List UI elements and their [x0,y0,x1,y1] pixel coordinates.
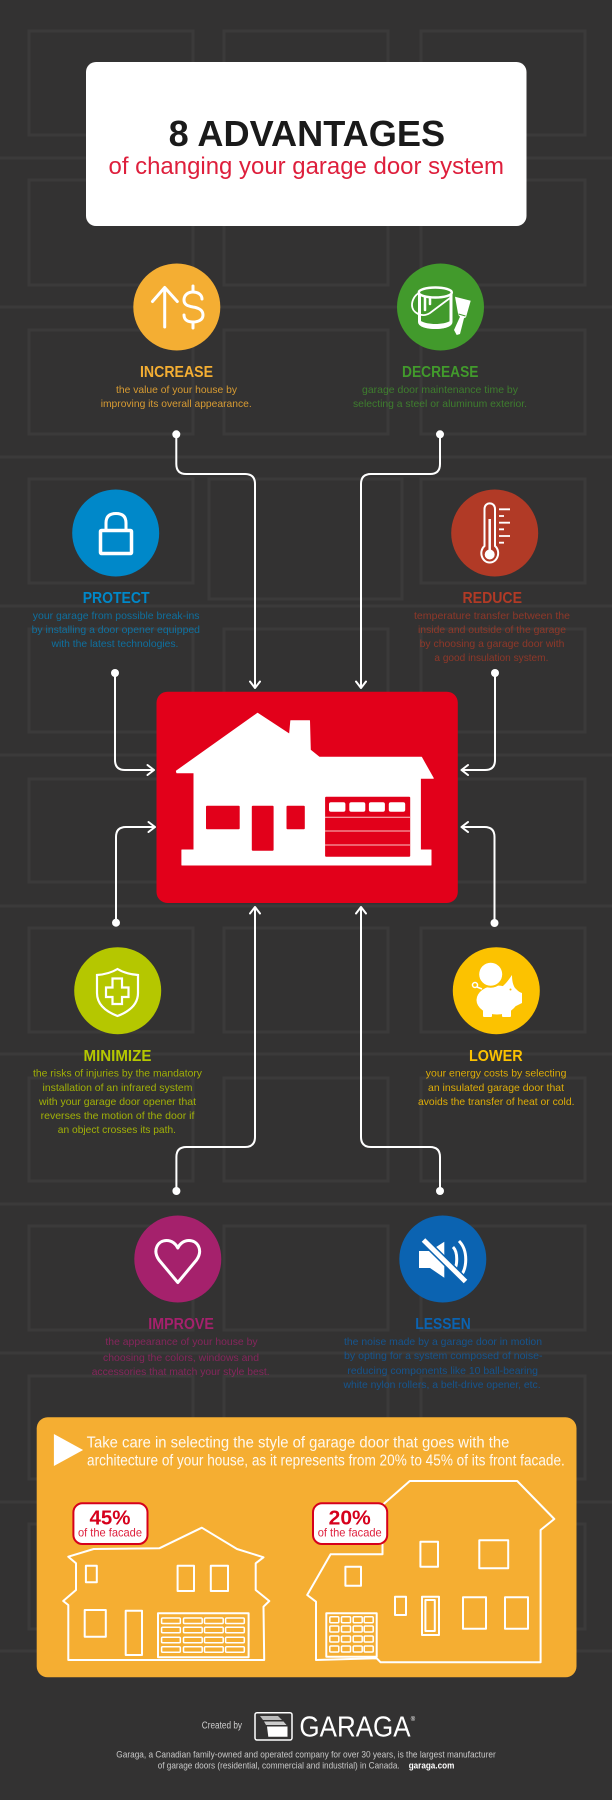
icon: paint can and brush [397,264,484,350]
text: improve: choosing the colors, windows and [103,1352,259,1364]
callout: 20 percent: of the facade [318,1526,382,1540]
icon: house silhouette [176,713,433,865]
advantage: increase [101,264,252,410]
logo: garaga: GARAGA [299,1712,411,1744]
icon: thermometer [451,490,538,576]
icon: heart [134,1216,221,1302]
icon: padlock [72,490,159,576]
text: increase [101,384,252,410]
advantage: improve [92,1216,270,1378]
icon: play triangle [54,1434,83,1466]
text: lessen: reducing components like 10 ball-bearing [347,1365,538,1377]
advantage: protect [32,490,200,650]
heading: minimize: MINIMIZE [84,1048,151,1065]
logo: garaga [255,1712,416,1744]
text: lower: an insulated garage door that [428,1082,564,1094]
text: decrease: garage door maintenance time by [362,384,519,396]
footer [116,1712,496,1771]
icon: piggy bank [453,947,540,1034]
advantage: decrease [353,264,527,410]
text: reduce: inside and outside of the garage [418,624,566,636]
title card [86,62,526,226]
panel text [87,1435,565,1470]
text: decrease [353,384,527,410]
text: minimize: the risks of injuries by the mandatory [33,1068,203,1080]
text: lessen: the noise made by a garage door in motion [344,1336,542,1348]
advantage: reduce [414,490,570,664]
house outline: 20 percent [307,1481,554,1662]
text: minimize: an object crosses its path. [58,1124,176,1136]
callout: 45 percent: 45% [90,1507,131,1529]
heading: reduce: REDUCE [462,590,522,607]
text: decrease: selecting a steel or aluminum exterior. [353,398,527,410]
advantage: lessen [343,1216,543,1391]
callout: 20 percent: 20% [329,1507,371,1529]
heading: improve: IMPROVE [148,1316,214,1333]
text: lessen [343,1336,543,1391]
heading: increase: INCREASE [140,364,213,381]
text: protect: by installing a door opener equipped [32,624,200,636]
text: lessen: white nylon rollers, a belt-drive opener, etc. [343,1379,541,1391]
text: reduce: temperature transfer between the [414,610,570,622]
company description: Garaga, a Canadian family-owned and operated company for over 30 years, is the largest manufacturer [116,1749,496,1760]
text: reduce: a good insulation system. [434,652,548,664]
text: lower: your energy costs by selecting [426,1068,567,1080]
callout: 45 percent [73,1503,148,1544]
arrow: decrease to house [356,430,444,688]
logo: garaga: ® [411,1716,416,1723]
icon: arrow up and dollar [133,264,220,350]
text: minimize: reverses the motion of the door if [41,1110,194,1122]
panel: facade share [37,1417,576,1677]
icon: shield with cross [74,947,161,1034]
house outline: 45 percent [63,1528,269,1660]
heading: lower: LOWER [469,1048,523,1065]
arrow: increase to house [172,430,260,688]
arrow: minimize to house [112,822,155,927]
heading: lessen: LESSEN [415,1316,471,1333]
text: lower [418,1068,574,1108]
text: minimize: with your garage door opener that [38,1096,196,1108]
arrow: reduce to house [462,669,499,775]
text: increase: the value of your house by [116,384,238,396]
arrow: lower to house [462,822,498,927]
heading: protect: PROTECT [83,590,150,607]
text: protect: with the latest technologies. [51,638,178,650]
text: increase: improving its overall appearance. [101,398,252,410]
title subheading: of changing your garage door system [108,153,504,180]
text: lower: avoids the transfer of heat or cold. [418,1096,574,1108]
text: minimize [33,1068,203,1136]
advantage: lower [418,947,574,1108]
text: reduce [414,610,570,664]
text: reduce: by choosing a garage door with [420,638,565,650]
heading: decrease: DECREASE [402,364,478,381]
arrow: protect to house [111,669,154,775]
text: protect [32,610,200,650]
company description: of garage doors (residential, commercial and industrial) in Canada. [158,1760,400,1771]
text: improve: the appearance of your house by [105,1336,258,1348]
arrow: lessen to house [356,907,444,1195]
arrow: improve to house [172,907,260,1195]
callout: 20 percent [313,1503,387,1544]
company description: garaga.com [409,1760,454,1771]
title heading: 8 ADVANTAGES [169,113,445,154]
callout: 45 percent: of the facade [78,1526,142,1540]
panel text: Take care in selecting the style of garage door that goes with the [87,1435,509,1452]
icon: muted speaker [399,1216,486,1302]
created by label: Created by [202,1721,242,1732]
text: lessen: by opting for a system composed of noise- [344,1350,543,1362]
advantage: minimize [33,947,203,1136]
text: protect: your garage from possible break-ins [33,610,199,622]
central red house panel [156,692,458,903]
text: improve [92,1336,270,1378]
company description [116,1749,496,1771]
text: improve: accessories that match your style best. [92,1366,270,1378]
text: minimize: installation of an infrared system [42,1082,193,1094]
